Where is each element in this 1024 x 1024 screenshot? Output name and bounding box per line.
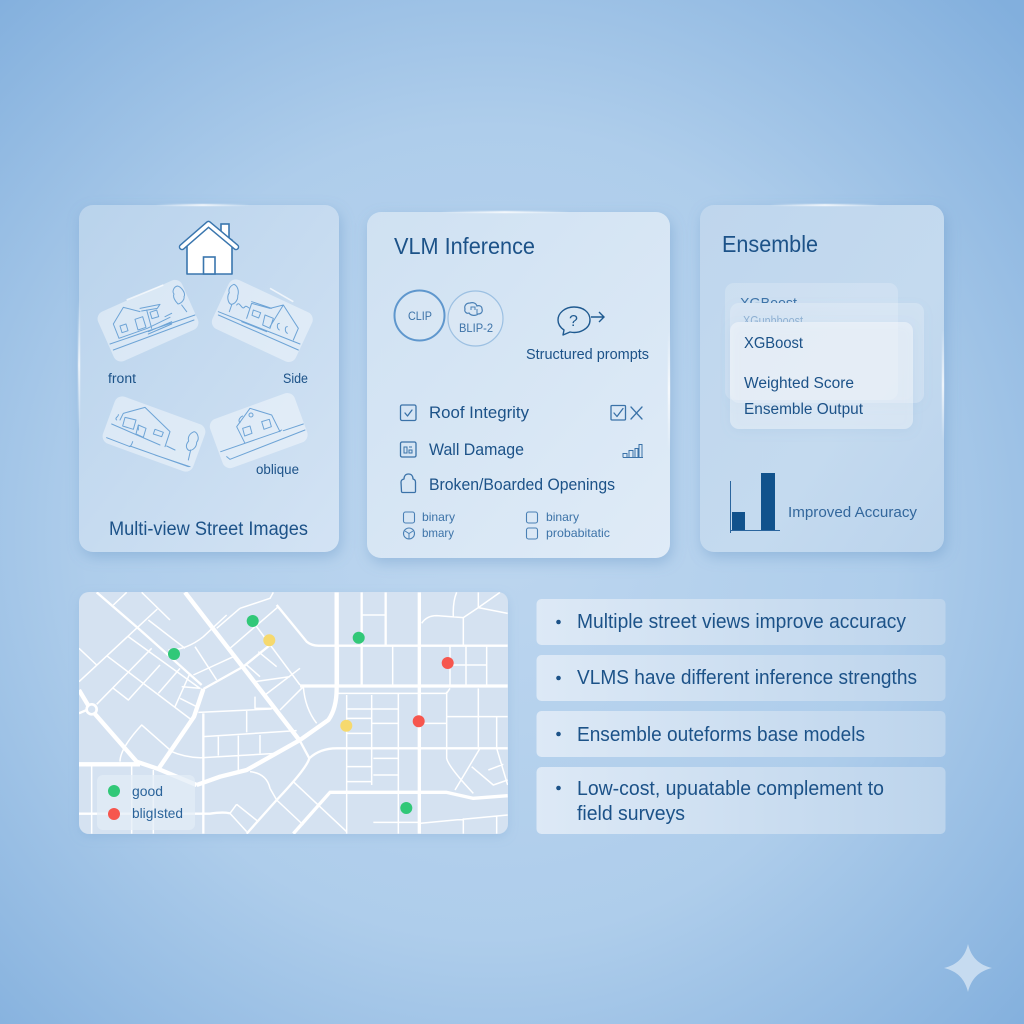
stacked model cards xyxy=(725,283,924,429)
takeaway: multiple street views: Multiple street views improve accuracy xyxy=(577,611,906,633)
image card: front view xyxy=(95,277,201,364)
stacked model cards: XGunhboost xyxy=(743,313,803,328)
icon: house xyxy=(182,224,236,274)
output types list xyxy=(404,510,610,540)
takeaway: ensemble xyxy=(536,711,946,757)
row: roof integrity xyxy=(400,404,642,422)
takeaway: low-cost complement: field surveys xyxy=(577,803,685,825)
model: CLIP xyxy=(394,290,444,340)
label: structured prompts: Structured prompts xyxy=(526,347,649,363)
model: BLIP-2: BLIP-2 xyxy=(459,321,493,335)
label: oblique: oblique xyxy=(256,462,299,477)
image card: rear view xyxy=(100,394,208,474)
label: weighted score: Weighted Score xyxy=(744,375,854,392)
row: broken/boarded openings: Broken/Boarded Openings xyxy=(429,476,615,494)
map legend: good xyxy=(132,783,163,799)
label: side: Side xyxy=(283,371,308,386)
takeaway: VLMS strengths xyxy=(536,655,946,701)
model: CLIP: CLIP xyxy=(408,309,432,323)
takeaway: low-cost complement xyxy=(536,767,946,834)
takeaway: VLMS strengths: VLMS have different inference strengths xyxy=(577,667,917,689)
row: wall damage: Wall Damage xyxy=(429,441,524,459)
map roads xyxy=(79,592,508,834)
label: ensemble output: Ensemble Output xyxy=(744,401,864,418)
output types list: bmary xyxy=(422,526,454,540)
map markers xyxy=(168,615,454,814)
stacked model cards: XGBoost xyxy=(740,295,798,312)
image card: side view xyxy=(209,277,315,365)
panel: ensemble xyxy=(700,204,944,552)
heading: VLM inference: VLM Inference xyxy=(394,233,535,259)
output types list: binary xyxy=(546,510,579,524)
takeaway: low-cost complement: Low-cost, upuatable complement to xyxy=(577,778,884,800)
heading: ensemble: Ensemble xyxy=(722,231,818,257)
takeaway: ensemble: Ensemble outeforms base models xyxy=(577,724,865,746)
panel: street map xyxy=(79,592,508,834)
label: XGBoost: XGBoost xyxy=(744,335,804,352)
output types list: binary xyxy=(422,510,455,524)
model: BLIP-2 xyxy=(448,291,503,346)
heading: multi-view street images: Multi-view Street Images xyxy=(109,519,308,540)
bar chart: improved accuracy xyxy=(730,473,780,533)
image card: oblique view xyxy=(208,391,310,470)
label: improved accuracy: Improved Accuracy xyxy=(788,504,917,521)
row: roof integrity: Roof Integrity xyxy=(429,404,530,422)
panel: multi-view street images xyxy=(78,204,339,552)
row: wall damage xyxy=(400,441,643,459)
takeaway: multiple street views xyxy=(536,599,946,645)
map legend: bligIsted xyxy=(132,805,183,821)
label: front: front xyxy=(108,371,136,386)
panel: VLM inference xyxy=(367,211,670,558)
icon: question bubble with arrow xyxy=(558,307,604,335)
icon: question bubble with arrow: ? xyxy=(569,313,578,330)
icon: sparkle xyxy=(944,944,992,992)
map legend xyxy=(97,775,195,830)
output types list: probabitatic xyxy=(546,526,610,540)
